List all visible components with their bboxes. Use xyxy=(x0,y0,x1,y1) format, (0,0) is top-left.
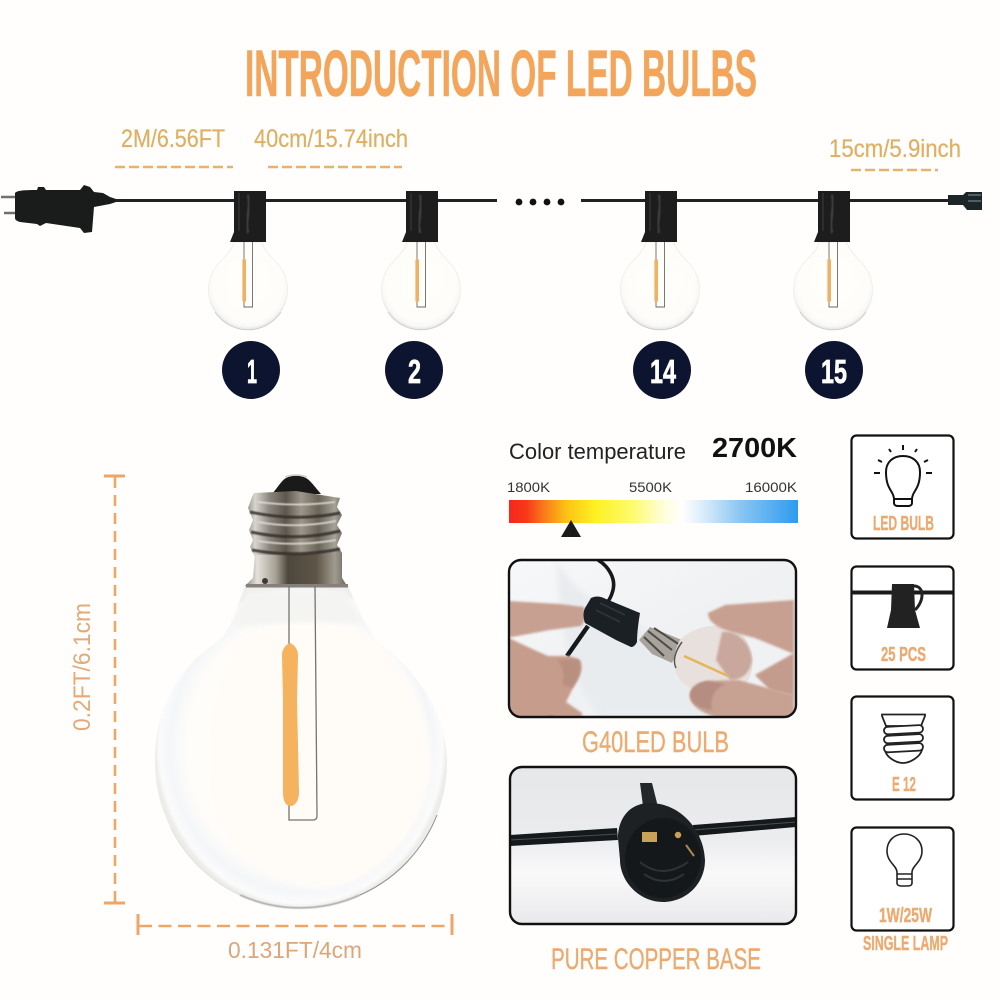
temperature marker xyxy=(561,520,581,537)
icon card: 25 pcs xyxy=(852,566,954,670)
lamp socket xyxy=(584,596,640,647)
string light wire xyxy=(100,199,950,202)
bulb filament xyxy=(282,586,317,820)
caption: pure copper base: PURE COPPER BASE xyxy=(551,943,761,976)
icon card: E12: E 12 xyxy=(892,774,916,796)
number badge 14: 14 xyxy=(650,353,676,390)
label: plug cable length xyxy=(115,125,233,167)
label: single lamp: SINGLE LAMP xyxy=(863,933,948,955)
bulb 2 xyxy=(382,191,460,330)
color temperature scale xyxy=(507,432,798,537)
left hand top finger xyxy=(509,601,585,637)
color temperature scale: 2700K xyxy=(712,432,797,463)
color temperature scale: 1800K xyxy=(507,479,551,495)
icon: end connector xyxy=(948,192,982,210)
socket contacts xyxy=(642,832,657,842)
icon card: LED bulb: LED BULB xyxy=(873,513,934,535)
color temperature scale: 16000K xyxy=(745,479,798,495)
icon card: E12 xyxy=(852,696,954,800)
large bulb illustration xyxy=(155,475,447,908)
label: end cable length: 15cm/5.9inch xyxy=(829,135,961,163)
dimension: bulb width xyxy=(138,914,452,963)
photo: lamp socket xyxy=(510,767,796,924)
icon: glowing bulb xyxy=(874,445,932,506)
bulb screw base xyxy=(245,475,348,588)
right hand top finger xyxy=(708,600,794,654)
dimension: bulb height xyxy=(69,476,125,903)
small glass bulb xyxy=(674,626,752,688)
dimension: bulb height: 0.2FT/6.1cm xyxy=(69,603,96,731)
number badge 2 xyxy=(385,341,443,399)
dimension: bulb width: 0.131FT/4cm xyxy=(228,937,362,963)
icon: socket on wire xyxy=(852,584,953,628)
number badge 14 xyxy=(633,341,691,399)
number badge 15: 15 xyxy=(821,353,847,390)
photo: hands screwing in bulb xyxy=(509,560,796,717)
caption: G40 LED bulb: G40LED BULB xyxy=(582,726,729,759)
label: plug cable length: 2M/6.56FT xyxy=(121,125,225,153)
screw base xyxy=(639,627,682,663)
color temperature scale: Color temperature xyxy=(509,439,686,464)
icon: power plug xyxy=(1,185,116,233)
right hand lower finger xyxy=(690,680,794,717)
label: bulb spacing: 40cm/15.74inch xyxy=(254,125,408,153)
icon card: 25 pcs: 25 PCS xyxy=(881,644,926,666)
number badge 2: 2 xyxy=(408,353,421,390)
number badge 1 xyxy=(222,341,280,399)
icon card: LED bulb xyxy=(852,436,954,538)
icon: screw base xyxy=(882,714,925,763)
icon card: wattage xyxy=(852,828,954,930)
icon card: wattage: 1W/25W xyxy=(879,905,932,927)
color temperature scale: 5500K xyxy=(629,479,673,495)
left hand lower fingers xyxy=(509,638,582,717)
number badge 1: 1 xyxy=(247,353,257,390)
bulb 1 xyxy=(208,191,288,330)
bulb 15 xyxy=(794,191,872,330)
ellipsis dots xyxy=(516,199,564,205)
number badge 15 xyxy=(805,341,863,399)
icon: round bulb outline xyxy=(887,834,922,886)
bulb 14 xyxy=(620,191,700,330)
